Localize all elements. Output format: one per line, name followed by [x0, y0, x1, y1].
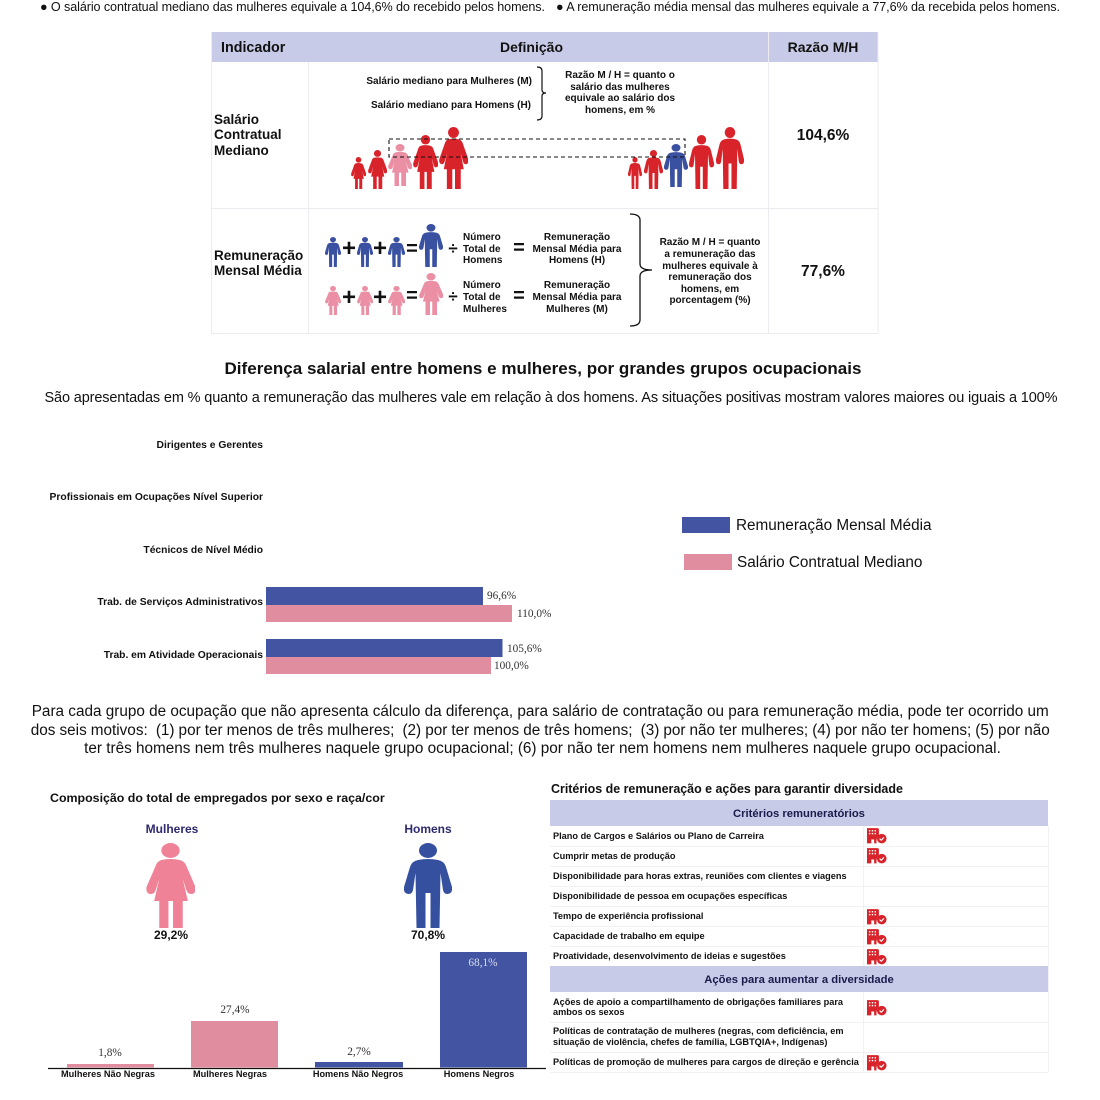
ratio explanation: median: salário das mulheres — [570, 82, 670, 93]
diversity action rows — [553, 997, 860, 1067]
formula: women: Mulheres — [463, 304, 507, 315]
formula: men — [325, 224, 622, 267]
table header: Razão M/H — [788, 39, 858, 55]
ratio explanation: average: a remuneração das — [664, 249, 756, 260]
ratio explanation: average: homens, em — [681, 284, 739, 295]
ratio explanation: average: mulheres equivale à — [662, 261, 758, 272]
chart legend: Salário Contratual Mediano — [737, 554, 922, 571]
median salary labels: Salário mediano para Mulheres (M) — [366, 76, 532, 87]
category labels — [50, 440, 263, 661]
icons: women ordered by salary — [351, 127, 468, 189]
row label: Salário Contratual Mediano: Mediano — [214, 143, 269, 158]
panel: indicator definition table — [211, 32, 878, 334]
ratio explanation: median: Razão M / H = quanto o — [565, 70, 675, 81]
ratio explanation: median: homens, em % — [585, 105, 655, 116]
bars: operational activities: 100,0% — [494, 660, 529, 672]
formula: men: ÷ — [448, 239, 458, 258]
formula: men: Total de — [463, 244, 501, 255]
note on missing calculations: ter três homens nem três mulheres naquele grupo ocupacional; (6) por não ter nem homens nem mulheres naquele grupo ocupacional. — [84, 740, 1001, 757]
column chart — [48, 952, 546, 1079]
brace: average pay — [630, 214, 652, 326]
men total: Homens — [404, 822, 452, 836]
median salary labels: Salário mediano para Homens (H) — [371, 100, 531, 111]
section title: pay gap by occupation: Diferença salarial entre homens e mulheres, por grandes grupos ocupacionais — [224, 359, 862, 378]
formula: women: Total de — [463, 292, 501, 303]
note on missing calculations: Para cada grupo de ocupação que não apresenta cálculo da diferença, para salário de contratação ou para remuneração média, pode ter ocorrido um — [32, 703, 1049, 720]
women total: Mulheres — [146, 822, 199, 836]
formula: women: Mulheres (M) — [546, 304, 608, 315]
formula: women: + — [373, 284, 387, 311]
column chart: 1,8% — [98, 1047, 122, 1059]
category labels: Dirigentes e Gerentes — [157, 440, 263, 451]
criteria rows: Tempo de experiência profissional — [553, 911, 703, 921]
column chart: 2,7% — [347, 1046, 371, 1058]
category labels: Trab. de Serviços Administrativos — [97, 597, 263, 608]
icons: men ordered by salary — [628, 127, 744, 189]
panel: criteria and diversity actions — [550, 782, 1048, 1072]
bars: administrative services: 110,0% — [517, 608, 552, 620]
formula: women: = — [406, 285, 418, 307]
formula: women: + — [342, 284, 356, 311]
panel heading: Critérios de remuneração e ações para garantir diversidade — [551, 782, 903, 796]
criteria rows: Proatividade, desenvolvimento de ideias e sugestões — [553, 951, 786, 961]
formula: men: Homens — [463, 255, 503, 266]
panel: employee composition — [48, 791, 546, 1079]
chart legend: Remuneração Mensal Média — [736, 517, 932, 534]
formula: women: Remuneração — [544, 280, 610, 291]
row label: Remuneração Mensal Média: Mensal Média — [214, 263, 302, 278]
column chart: 27,4% — [220, 1004, 250, 1016]
criteria check icons — [867, 828, 887, 964]
criteria rows: Capacidade de trabalho em equipe — [553, 931, 705, 941]
column chart: Mulheres Não Negras — [61, 1069, 155, 1079]
note on missing calculations: dos seis motivos: (1) por ter menos de três mulheres; (2) por ter menos de três homens; (3) por não ter mulheres; (4) por não ter homens; (5) por não — [31, 722, 1050, 739]
criteria rows: Disponibilidade para horas extras, reuniões com clientes e viagens — [553, 871, 847, 881]
bars: operational activities — [266, 639, 542, 674]
summary: average pay: ● A remuneração média mensal das mulheres equivale a 77,6% da recebida pelos homens. — [556, 0, 1060, 14]
summary: contractual salary: ● O salário contratual mediano das mulheres equivale a 104,6% do recebido pelos homens. — [40, 0, 545, 14]
header: remuneration criteria — [550, 800, 1048, 826]
criteria rows: Cumprir metas de produção — [553, 851, 676, 861]
criteria rows — [553, 831, 847, 961]
diversity action check icons — [867, 1000, 887, 1070]
value: 104,6%: 104,6% — [797, 127, 849, 144]
top summary sentences — [40, 0, 1060, 14]
row label: Salário Contratual Mediano: Contratual — [214, 127, 282, 142]
bars: operational activities: 105,6% — [507, 643, 542, 655]
women total: 29,2% — [154, 928, 188, 942]
column chart: Homens Negros — [444, 1069, 514, 1079]
diversity action rows: Políticas de promoção de mulheres para cargos de direção e gerência — [553, 1057, 860, 1067]
chart legend — [682, 517, 932, 571]
table header: Definição — [500, 39, 563, 55]
men total: 70,8% — [411, 928, 445, 942]
formula: men: Mensal Média para — [533, 244, 622, 255]
formula: men: = — [513, 237, 525, 259]
brace: median salary — [537, 67, 546, 120]
category labels: Profissionais em Ocupações Nível Superior — [50, 492, 263, 503]
value: 77,6%: 77,6% — [801, 263, 845, 280]
median salary labels — [366, 76, 532, 111]
diversity action rows: Políticas de contratação de mulheres (negras, com deficiência, em — [553, 1026, 844, 1036]
women total — [146, 822, 199, 942]
formula: women: Número — [463, 280, 501, 291]
bars: administrative services — [266, 587, 552, 622]
table header: Indicador — [221, 40, 286, 56]
column chart: 68,1% — [468, 957, 498, 969]
diversity action rows: Ações de apoio a compartilhamento de obrigações familiares para — [553, 997, 844, 1007]
ratio explanation: average: Razão M / H = quanto — [660, 237, 760, 248]
formula: men: + — [373, 235, 387, 262]
bar chart: pay ratio by occupation — [50, 440, 552, 674]
diversity action rows: ambos os sexos — [553, 1007, 624, 1017]
dashed median link — [389, 139, 685, 157]
ratio explanation: average: porcentagem (%) — [669, 295, 751, 306]
header: diversity actions: Ações para aumentar a diversidade — [704, 974, 894, 986]
ratio explanation: median: equivale ao salário dos — [565, 93, 675, 104]
category labels: Técnicos de Nível Médio — [143, 545, 263, 556]
row label: Salário Contratual Mediano: Salário — [214, 112, 259, 127]
criteria rows: Plano de Cargos e Salários ou Plano de Carreira — [553, 831, 765, 841]
column chart: Mulheres Negras — [193, 1069, 267, 1079]
formula: women: Mensal Média para — [533, 292, 622, 303]
formula: women: ÷ — [448, 287, 458, 306]
panel heading: Composição do total de empregados por sexo e raça/cor — [50, 791, 385, 805]
header: diversity actions — [550, 966, 1048, 992]
table header — [211, 32, 878, 62]
bars: administrative services: 96,6% — [487, 590, 517, 602]
header: remuneration criteria: Critérios remuneratórios — [733, 808, 865, 820]
ratio explanation: average: remuneração dos — [668, 272, 752, 283]
formula: men: Remuneração — [544, 232, 610, 243]
men total — [404, 822, 452, 942]
formula: men: Homens (H) — [549, 255, 605, 266]
category labels: Trab. em Atividade Operacionais — [104, 650, 263, 661]
formula: men: + — [342, 235, 356, 262]
formula: women — [325, 273, 622, 315]
row label: Remuneração Mensal Média: Remuneração — [214, 248, 303, 263]
criteria rows: Disponibilidade de pessoa em ocupações específicas — [553, 891, 787, 901]
section subtitle: São apresentadas em % quanto a remuneração das mulheres vale em relação à dos homens. As situações positivas mostram valores maiores ou iguais a 100% — [44, 390, 1058, 406]
diversity action rows: situação de violência, chefes de família, LGBTQIA+, Indígenas) — [553, 1037, 827, 1047]
formula: men: Número — [463, 232, 501, 243]
column chart: Homens Não Negros — [313, 1069, 403, 1079]
formula: women: = — [513, 285, 525, 307]
formula: men: = — [406, 238, 418, 260]
